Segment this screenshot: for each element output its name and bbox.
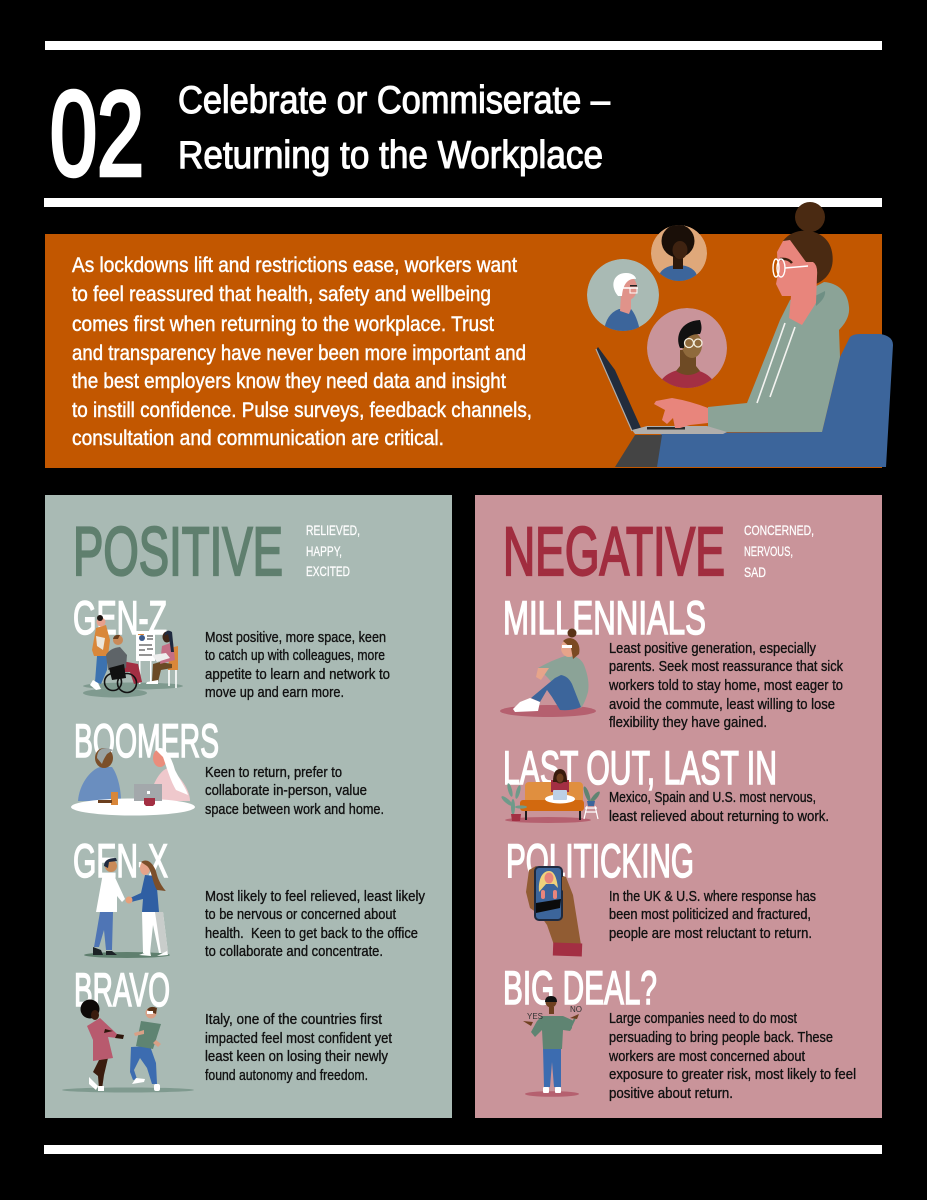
heading: Millennials: MILLENNIALS [503,591,706,644]
NEGATIVE heading: NEGATIVE [503,513,725,590]
text: Big deal: persuading to bring people back. These [609,1029,833,1046]
positive moods [306,522,360,579]
heading: Gen-X: GEN-X [73,834,168,887]
text: Gen-Z: Most positive, more space, keen [205,629,386,646]
POSITIVE heading: POSITIVE [73,513,283,590]
panel: positive [45,495,452,1118]
section number: 02 [50,67,144,201]
text: Gen-Z: move up and earn more. [205,684,344,701]
heading: Politicking: POLITICKING [506,834,694,887]
illustration: Boomers at table [71,748,195,816]
text: Last out, last in: Mexico, Spain and U.S. most nervous, [609,789,816,806]
text: Gen-X [205,888,425,960]
illustration: shrugging man [523,996,582,1097]
title rule [44,198,882,207]
intro text: the best employers know they need data and insight [72,370,506,393]
text: Boomers: space between work and home. [205,801,384,818]
eyebrow and glasses [773,259,808,277]
text: Millennials [608,640,843,731]
text: Gen-Z: to catch up with colleagues, more [205,647,385,664]
text: Bravo [205,1011,393,1084]
positive moods: EXCITED [306,563,350,579]
bun and hair [783,202,833,284]
text: Millennials: workers told to stay home, most eager to [608,677,843,694]
text: Gen-X: to be nervous or concerned about [205,906,397,923]
heading: Bravo: BRAVO [74,963,170,1016]
text: Big deal: positive about return. [609,1085,733,1102]
illustration: sitting woman [500,628,596,717]
text: Last out, last in [609,789,829,825]
heading: Gen-Z: GEN-Z [73,591,167,644]
title: Celebrate or Commiserate – [178,79,610,122]
heading: Last out, last in: LAST OUT, LAST IN [503,741,777,794]
text: Bravo: impacted feel most confident yet [205,1030,393,1047]
text: Boomers: Keen to return, prefer to [205,764,342,781]
text: Last out, last in: least relieved about returning to work. [609,808,829,825]
text: Big deal: workers are most concerned about [608,1048,806,1065]
video call avatar: man with glasses [647,308,727,388]
intro text: to feel reassured that health, safety and wellbeing [72,283,491,306]
video call avatar: afro [651,225,707,281]
title: Returning to the Workplace [178,134,603,177]
text: Gen-X: Most likely to feel relieved, least likely [205,888,425,905]
text: Bravo: least keen on losing their newly [205,1048,388,1065]
text: Bravo: Italy, one of the countries first [205,1011,383,1028]
illustration: hand holding phone [526,866,582,957]
negative moods: NERVOUS, [744,543,793,559]
text: Millennials: flexibility they have gained. [609,714,767,731]
positive moods: HAPPY, [306,543,342,559]
illustration: Bravo dancers [62,1000,194,1092]
illustration: woman on video call [587,202,893,467]
illustration: woman on couch [500,769,601,823]
illustration: Gen-Z group [83,615,183,698]
negative moods [744,522,814,580]
text: Big deal [608,1010,856,1102]
video call avatar: white-haired man [587,259,659,331]
label: yes: YES [527,1012,543,1021]
intro text: As lockdowns lift and restrictions ease, workers want [72,254,517,277]
text: Millennials: avoid the commute, least willing to lose [609,696,835,713]
laptop [596,347,727,434]
text: Gen-Z: appetite to learn and network to [205,666,390,683]
text: Politicking: people are most reluctant to return. [609,925,812,942]
hoodie [708,282,849,432]
intro text [72,254,532,450]
title [178,79,610,177]
panel: negative [475,495,882,1118]
intro text: to instill confidence. Pulse surveys, feedback channels, [72,399,532,422]
legs [615,435,662,467]
text: Politicking [609,888,816,942]
text: Boomers: collaborate in-person, value [205,782,367,799]
top rule [45,41,882,50]
heading: Boomers: BOOMERS [74,714,219,767]
negative moods: SAD [744,564,766,580]
text: Boomers [205,764,384,818]
text: Bravo: found autonomy and freedom. [205,1067,368,1084]
intro text: and transparency have never been more important and [72,342,526,365]
text: Gen-Z [205,629,390,701]
hand [654,398,708,428]
face [776,240,817,325]
label: no: NO [570,1005,582,1014]
armchair [657,334,893,467]
intro text: comes first when returning to the workplace. Trust [72,313,494,336]
panel: intro [45,234,882,468]
intro text: consultation and communication are critical. [72,427,444,450]
text: Big deal: exposure to greater risk, most likely to feel [609,1066,856,1083]
text: Politicking: been most politicized and fractured, [609,906,811,923]
text: Millennials: Least positive generation, especially [609,640,816,657]
text: Politicking: In the UK & U.S. where response has [609,888,816,905]
text: Gen-X: health. Keen to get back to the office [205,925,418,942]
hoodie strings [757,323,795,403]
heading: Big deal: BIG DEAL? [503,961,657,1014]
bottom rule [44,1145,882,1154]
text: Big deal: Large companies need to do most [609,1010,798,1027]
negative moods: CONCERNED, [744,522,814,538]
text: Gen-X: to collaborate and concentrate. [205,943,383,960]
illustration: Gen-X handshake [84,858,170,958]
text: Millennials: parents. Seek most reassurance that sick [609,658,843,675]
positive moods: RELIEVED, [306,522,360,538]
